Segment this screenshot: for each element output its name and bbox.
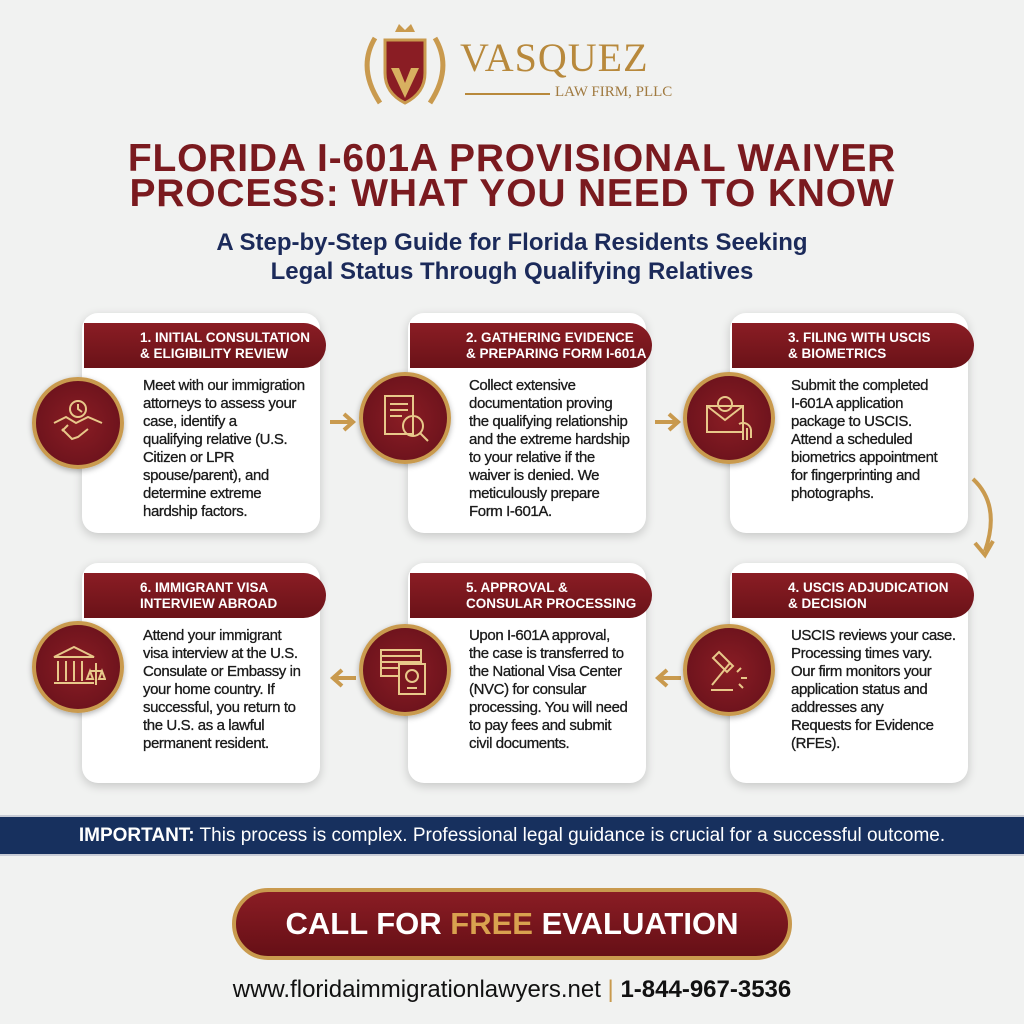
title: FLORIDA I-601A PROVISIONAL WAIVER	[128, 137, 896, 180]
button: call: CALL FOR FREE EVALUATION	[286, 906, 738, 941]
banner: important: IMPORTANT: This process is complex. Professional legal guidance is crucial for a successful outcome.	[79, 825, 945, 846]
panel: step 3: biometrics appointment	[791, 449, 937, 466]
panel: step 3: Submit the completed	[791, 377, 928, 394]
panel: step 2: Form I-601A.	[469, 503, 552, 520]
panel: step 3: & BIOMETRICS	[788, 346, 886, 361]
panel: step 4	[730, 563, 968, 783]
logo	[364, 24, 672, 105]
arrow: 5 to 6	[330, 668, 356, 688]
panel: step 6: visa interview at the U.S.	[143, 645, 298, 662]
banner: important	[0, 815, 1024, 856]
panel: step 6: Attend your immigrant	[143, 627, 281, 644]
panel: step 4: application status and	[791, 681, 927, 698]
subtitle: Legal Status Through Qualifying Relatives	[271, 258, 753, 285]
panel: step 3	[730, 313, 968, 533]
panel: step 5: to pay fees and submit	[469, 717, 611, 734]
icon: envelope fingerprint	[683, 372, 775, 464]
panel: step 4: USCIS reviews your case.	[791, 627, 956, 644]
panel: step 4: Requests for Evidence	[791, 717, 934, 734]
panel: step 5: the National Visa Center	[469, 663, 622, 680]
panel: step 2: meticulously prepare	[469, 485, 599, 502]
panel: step 1: & ELIGIBILITY REVIEW	[140, 346, 288, 361]
panel: step 3: for fingerprinting and	[791, 467, 920, 484]
arrow: 4 to 5	[655, 668, 681, 688]
panel: step 6: your home country. If	[143, 681, 274, 698]
panel: step 1: attorneys to assess your	[143, 395, 296, 412]
firm name: VASQUEZ	[460, 35, 649, 80]
panel: step 1: Meet with our immigration	[143, 377, 305, 394]
panel: step 4: Our firm monitors your	[791, 663, 931, 680]
panel: step 4: addresses any	[791, 699, 883, 716]
contact line: www.floridaimmigrationlawyers.net | 1-844-967-3536	[233, 976, 791, 1003]
panel: step 2: the qualifying relationship	[469, 413, 627, 430]
arrow: curved 3 to 4	[972, 478, 995, 558]
panel: step 5	[408, 563, 646, 783]
title: PROCESS: WHAT YOU NEED TO KNOW	[129, 172, 895, 215]
panel: step 3: I-601A application	[791, 395, 903, 412]
arrow: 1 to 2	[330, 412, 356, 432]
panel: step 1: determine extreme	[143, 485, 261, 502]
panel: step 2: 2. GATHERING EVIDENCE	[466, 330, 634, 345]
panel: step 2: and the extreme hardship	[469, 431, 630, 448]
panel: step 6: successful, you return to	[143, 699, 296, 716]
logo emblem	[364, 24, 446, 105]
panel: step 4: 4. USCIS ADJUDICATION	[788, 580, 949, 595]
panel: step 6: 6. IMMIGRANT VISA	[140, 580, 268, 595]
panel: step 2	[408, 313, 646, 533]
panel: step 5: 5. APPROVAL &	[466, 580, 568, 595]
firm subtitle: LAW FIRM, PLLC	[555, 84, 672, 100]
panel: step 2: & PREPARING FORM I-601A	[466, 346, 647, 361]
panel: step 1: qualifying relative (U.S.	[143, 431, 287, 448]
panel: step 5: Upon I-601A approval,	[469, 627, 610, 644]
panel: step 4: Processing times vary.	[791, 645, 932, 662]
panel: step 5: processing. You will need	[469, 699, 627, 716]
button: call	[232, 888, 792, 960]
icon: flag passport	[359, 624, 451, 716]
panel: step 2: Collect extensive	[469, 377, 576, 394]
panel: step 1: 1. INITIAL CONSULTATION	[140, 330, 310, 345]
panel: step 4: (RFEs).	[791, 735, 840, 752]
panel: step 1: spouse/parent), and	[143, 467, 269, 484]
panel: step 5: (NVC) for consular	[469, 681, 586, 698]
panel: step 2: documentation proving	[469, 395, 612, 412]
panel: step 1: hardship factors.	[143, 503, 247, 520]
subtitle	[216, 229, 808, 285]
panel: step 1: Citizen or LPR	[143, 449, 234, 466]
panel: step 3: 3. FILING WITH USCIS	[788, 330, 931, 345]
panel: step 6: permanent resident.	[143, 735, 269, 752]
panel: step 5: civil documents.	[469, 735, 569, 752]
icon: gavel	[683, 624, 775, 716]
panel: step 3: Attend a scheduled	[791, 431, 912, 448]
panel: step 3: package to USCIS.	[791, 413, 912, 430]
panel: step 3: photographs.	[791, 485, 874, 502]
panel: step 5: CONSULAR PROCESSING	[466, 596, 636, 611]
panel: step 2: to your relative if the	[469, 449, 595, 466]
panel: step 5: the case is transferred to	[469, 645, 624, 662]
icon: documents	[359, 372, 451, 464]
panel: step 1: case, identify a	[143, 413, 237, 430]
icon: handshake	[32, 377, 124, 469]
panel: step 4: & DECISION	[788, 596, 867, 611]
panel: step 2: waiver is denied. We	[469, 467, 599, 484]
icon: courthouse	[32, 621, 124, 713]
panel: step 6: INTERVIEW ABROAD	[140, 596, 277, 611]
panel: step 6: the U.S. as a lawful	[143, 717, 264, 734]
title	[128, 137, 896, 215]
arrow: 2 to 3	[655, 412, 681, 432]
panel: step 6	[82, 563, 320, 783]
subtitle: A Step-by-Step Guide for Florida Residents Seeking	[216, 229, 808, 256]
panel: step 1	[82, 313, 320, 533]
panel: step 6: Consulate or Embassy in	[143, 663, 301, 680]
